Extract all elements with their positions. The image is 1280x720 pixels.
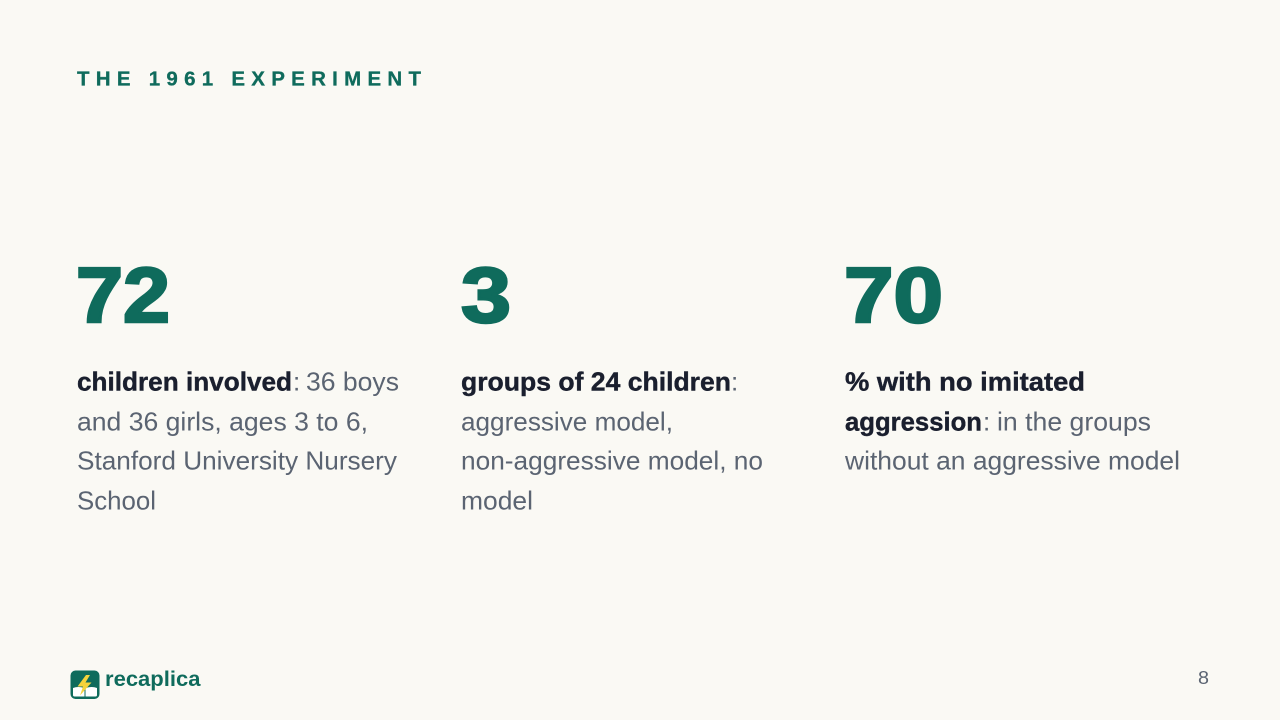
panel: groups xyxy=(461,251,763,516)
description: children involved: and 36 girls, ages 3 to 6, xyxy=(77,406,368,436)
wordmark: recaplica xyxy=(105,668,201,691)
title: THE 1961 EXPERIMENT xyxy=(77,68,421,90)
stat number: 70: 70 xyxy=(844,251,943,339)
description: percent with no imitated aggression: in the groups xyxy=(997,406,1151,436)
description: children involved: Stanford University Nursery xyxy=(77,446,397,476)
icon: book with lightning bolt xyxy=(70,670,100,699)
description: percent with no imitated aggression: aggression xyxy=(845,406,982,436)
panel: children involved xyxy=(76,251,399,516)
stat number: 3: 3 xyxy=(461,251,511,339)
logo xyxy=(70,668,201,699)
description: percent with no imitated aggression xyxy=(844,366,1180,476)
description: groups of 24 children: non-aggressive model, no xyxy=(461,446,763,476)
description: percent with no imitated aggression: without an aggressive model xyxy=(844,446,1180,476)
description: groups of 24 children: model xyxy=(461,486,533,516)
description: percent with no imitated aggression: : xyxy=(983,406,990,436)
description: children involved: School xyxy=(77,486,156,516)
description: children involved: children involved xyxy=(77,366,292,396)
description: groups of 24 children: groups of 24 children xyxy=(461,366,731,396)
panel: no imitated aggression xyxy=(844,251,1180,476)
description: children involved: : xyxy=(293,366,300,396)
page number: 8 xyxy=(1198,668,1209,688)
description: children involved xyxy=(77,366,399,516)
description: percent with no imitated aggression: % with no imitated xyxy=(845,366,1085,396)
description: children involved: 36 boys xyxy=(306,366,399,396)
description: groups of 24 children xyxy=(461,366,763,516)
description: groups of 24 children: : xyxy=(731,366,738,396)
stat number: 72: 72 xyxy=(76,251,170,339)
description: groups of 24 children: aggressive model, xyxy=(461,406,673,436)
